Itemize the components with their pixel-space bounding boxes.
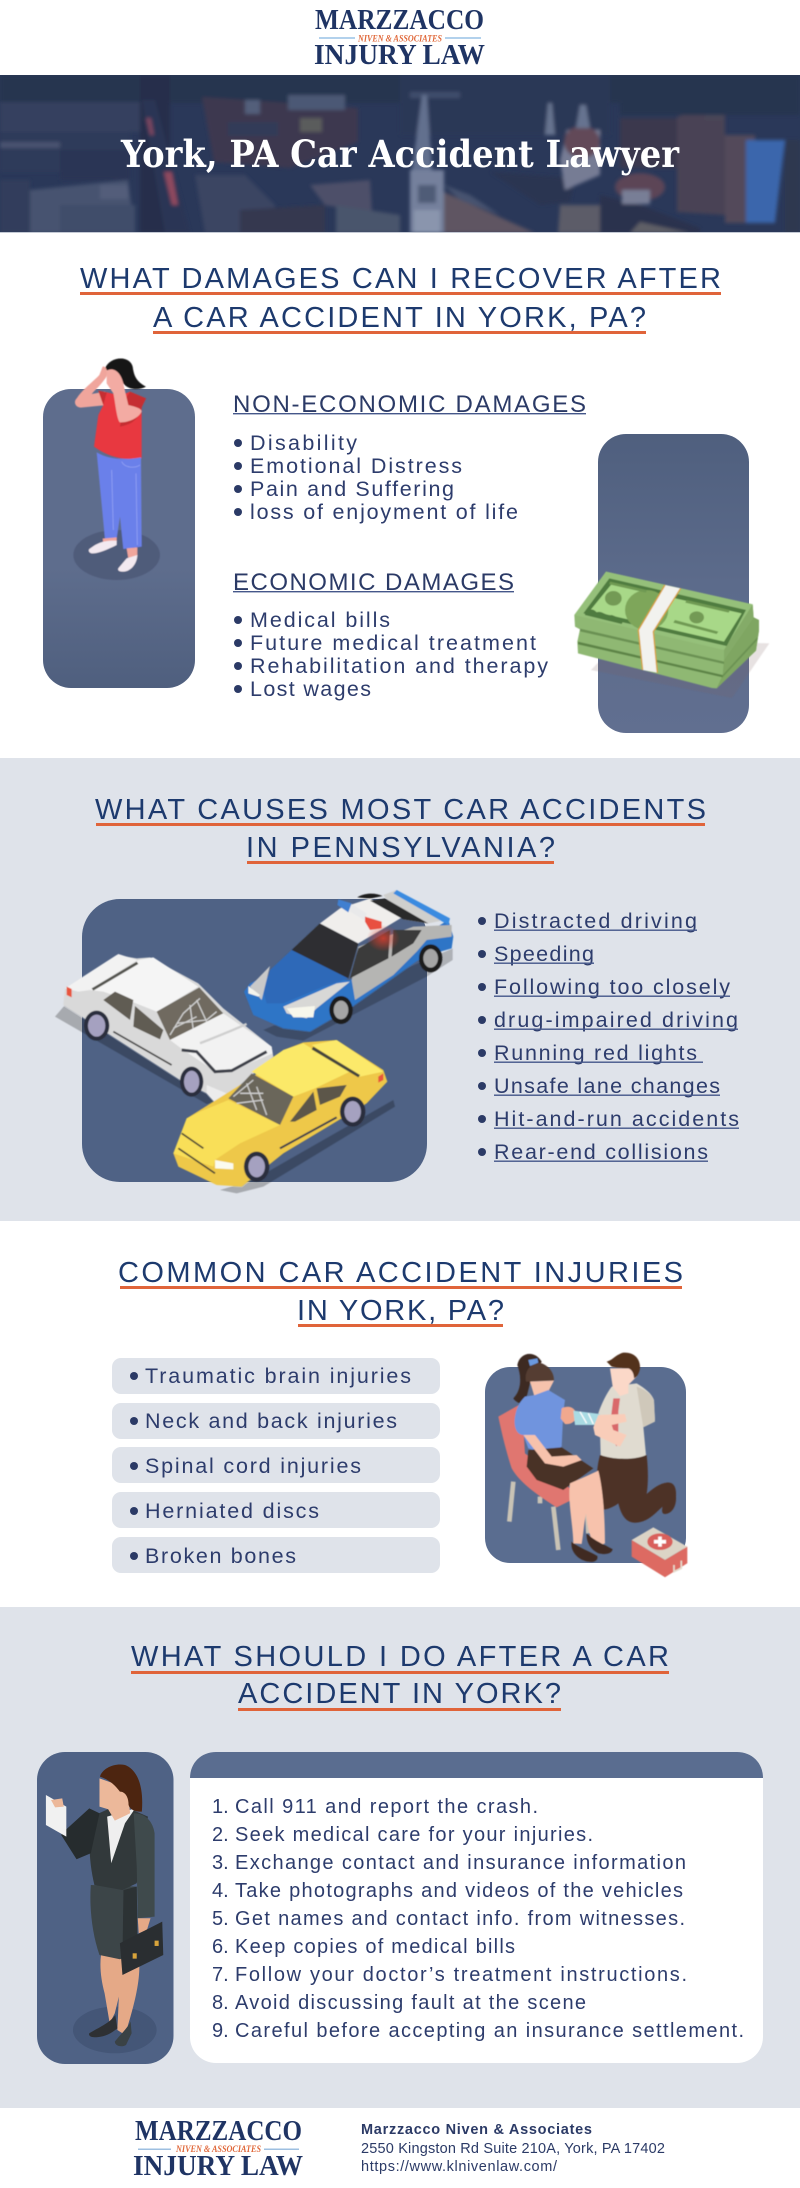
list: steps: Careful before accepting an insurance settlement. [235,2020,744,2042]
list: steps: 4. [212,1880,229,1902]
list: causes: Running red lights [494,1041,697,1065]
list: steps: Call 911 and report the crash. [235,1796,538,1818]
icon: distressed woman [73,358,160,580]
icon: crashed cars [55,890,453,1193]
list: non-economic damages: loss of enjoyment of life [250,500,518,524]
header logo [314,5,485,71]
list: causes: Following too closely [494,975,730,999]
header logo: INJURY LAW [314,40,485,71]
heading: injuries [118,1257,683,1327]
white car [55,954,273,1104]
heading: damages: A CAR ACCIDENT IN YORK, PA? [153,302,646,334]
icon: businesswoman [46,1764,163,2053]
section background: what to do [0,1607,800,2108]
footer contact details: https://www.klnivenlaw.com/ [361,2159,558,2175]
list: causes: Speeding [494,942,594,966]
list: steps: 5. [212,1908,229,1930]
panel: businesswoman pill [37,1752,174,2064]
list: steps: Get names and contact info. from witnesses. [235,1908,685,1930]
list: steps [212,1796,744,2042]
footer logo [133,2116,303,2182]
heading: injuries: IN YORK, PA? [297,1295,504,1327]
list: steps: Take photographs and videos of the vehicles [235,1880,683,1902]
card: steps [190,1752,763,2063]
banner title: York, PA Car Accident Lawyer [120,132,679,176]
list: steps: 3. [212,1852,229,1874]
list: economic damages [234,608,548,701]
list: non-economic damages [234,431,518,524]
header logo: NIVEN & ASSOCIATES [357,34,442,44]
subheading: economic damages: ECONOMIC DAMAGES [233,569,514,596]
police car [244,890,453,1041]
list: non-economic damages: Pain and Suffering [250,477,454,501]
heading: injuries: COMMON CAR ACCIDENT INJURIES [118,1257,683,1289]
footer contact details [361,2122,665,2175]
list: injuries [112,1358,440,1573]
list: economic damages: Future medical treatment [250,631,536,655]
list: causes: Distracted driving [494,909,697,933]
list: non-economic damages: Disability [250,431,357,455]
heading: causes [95,794,706,864]
footer contact details: 2550 Kingston Rd Suite 210A, York, PA 17402 [361,2141,665,2157]
list: steps: Follow your doctor’s treatment instructions. [235,1964,687,1986]
list: steps: 2. [212,1824,229,1846]
list: steps: 7. [212,1964,229,1986]
list: steps: Keep copies of medical bills [235,1936,515,1958]
list: causes: Unsafe lane changes [494,1074,720,1098]
panel: cars background [82,899,427,1182]
icon: man bandaging woman's arm [498,1353,687,1577]
footer logo: NIVEN & ASSOCIATES [175,2145,261,2155]
section background: causes [0,758,800,1221]
header logo: MARZZACCO [315,5,484,36]
list: injuries: Herniated discs [145,1499,319,1523]
panel: injury illustration background [485,1367,686,1563]
list: steps: 1. [212,1796,229,1818]
list: steps: Seek medical care for your injuries. [235,1824,593,1846]
heading: what to do: WHAT SHOULD I DO AFTER A CAR [131,1641,669,1673]
list: injuries: Broken bones [145,1544,296,1568]
list: injuries: Neck and back injuries [145,1409,397,1433]
heading: causes: IN PENNSYLVANIA? [246,832,555,864]
heading: damages [80,263,721,334]
heading: causes: WHAT CAUSES MOST CAR ACCIDENTS [95,794,706,826]
list: steps: 9. [212,2020,229,2042]
list: steps: Exchange contact and insurance information [235,1852,686,1874]
banner: city aerial photo with title [0,75,800,233]
heading: damages: WHAT DAMAGES CAN I RECOVER AFTER [80,263,721,295]
list: economic damages: Lost wages [250,677,371,701]
list: injuries: Spinal cord injuries [145,1454,361,1478]
footer logo: INJURY LAW [133,2151,303,2182]
panel: money pill [598,434,749,733]
list: steps: 8. [212,1992,229,2014]
list: economic damages: Medical bills [250,608,390,632]
list: steps: 6. [212,1936,229,1958]
footer logo: MARZZACCO [135,2116,302,2147]
list: causes: Rear-end collisions [494,1140,708,1164]
list: steps: Avoid discussing fault at the scene [235,1992,586,2014]
list: causes: drug-impaired driving [494,1008,738,1032]
heading: what to do: ACCIDENT IN YORK? [238,1678,561,1710]
list: causes: Hit-and-run accidents [494,1107,739,1131]
panel: woman pill [43,389,195,688]
yellow car [173,1040,395,1193]
list: non-economic damages: Emotional Distress [250,454,462,478]
list: causes [478,909,739,1164]
heading: what to do [131,1641,669,1711]
subheading: non-economic damages: NON-ECONOMIC DAMAGES [233,391,586,418]
list: economic damages: Rehabilitation and therapy [250,654,548,678]
list: injuries: Traumatic brain injuries [145,1364,411,1388]
footer contact details: Marzzacco Niven & Associates [361,2122,592,2138]
icon: stack of money [574,572,769,698]
